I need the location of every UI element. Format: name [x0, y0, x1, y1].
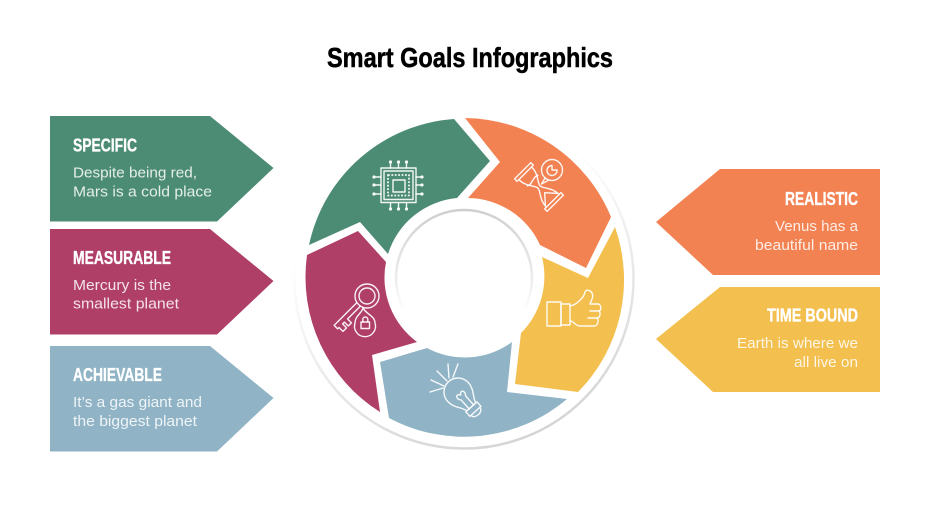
panel: time bound: [656, 287, 880, 392]
text: specific description: Despite being red,: [73, 166, 197, 182]
panel: measurable: [50, 229, 274, 334]
text: specific description: Mars is a cold place: [73, 184, 212, 200]
icon: hourglass with clock: [515, 160, 563, 211]
icon: light bulb: [430, 364, 489, 424]
segment: magenta: [305, 231, 417, 412]
heading: measurable: MEASURABLE: [73, 247, 171, 268]
text: time bound description: Earth is where we: [737, 336, 858, 352]
title: Smart Goals Infographics: [327, 42, 613, 73]
text: realistic description: [755, 219, 859, 254]
heading: time bound: TIME BOUND: [767, 304, 858, 326]
text: realistic description: Venus has a: [775, 219, 859, 235]
text: achievable description: the biggest planet: [73, 414, 197, 430]
text: measurable description: Mercury is the: [73, 278, 171, 294]
text: time bound description: [737, 336, 858, 371]
heading: achievable: ACHIEVABLE: [73, 364, 162, 385]
heading: realistic: REALISTIC: [785, 188, 858, 209]
text: specific description: [73, 166, 212, 200]
text: realistic description: beautiful name: [755, 238, 858, 254]
panel: specific: [50, 116, 274, 222]
panel: realistic: [656, 169, 880, 275]
icon: microchip: [374, 162, 422, 209]
text: achievable description: [73, 395, 202, 430]
segment: green: [309, 119, 490, 254]
icon: key with padlock drop: [327, 279, 384, 337]
text: measurable description: [73, 278, 179, 312]
segment: yellow: [515, 227, 624, 392]
text: time bound description: all live on: [794, 355, 858, 371]
heading: specific: SPECIFIC: [73, 134, 137, 156]
circular cycle diagram: [294, 110, 634, 448]
icon: thumbs up: [547, 290, 601, 326]
text: measurable description: smallest planet: [73, 296, 179, 312]
segment: blue: [380, 342, 567, 437]
segment: orange: [465, 118, 611, 268]
text: achievable description: It’s a gas giant and: [73, 395, 202, 411]
panel: achievable: [50, 346, 274, 452]
